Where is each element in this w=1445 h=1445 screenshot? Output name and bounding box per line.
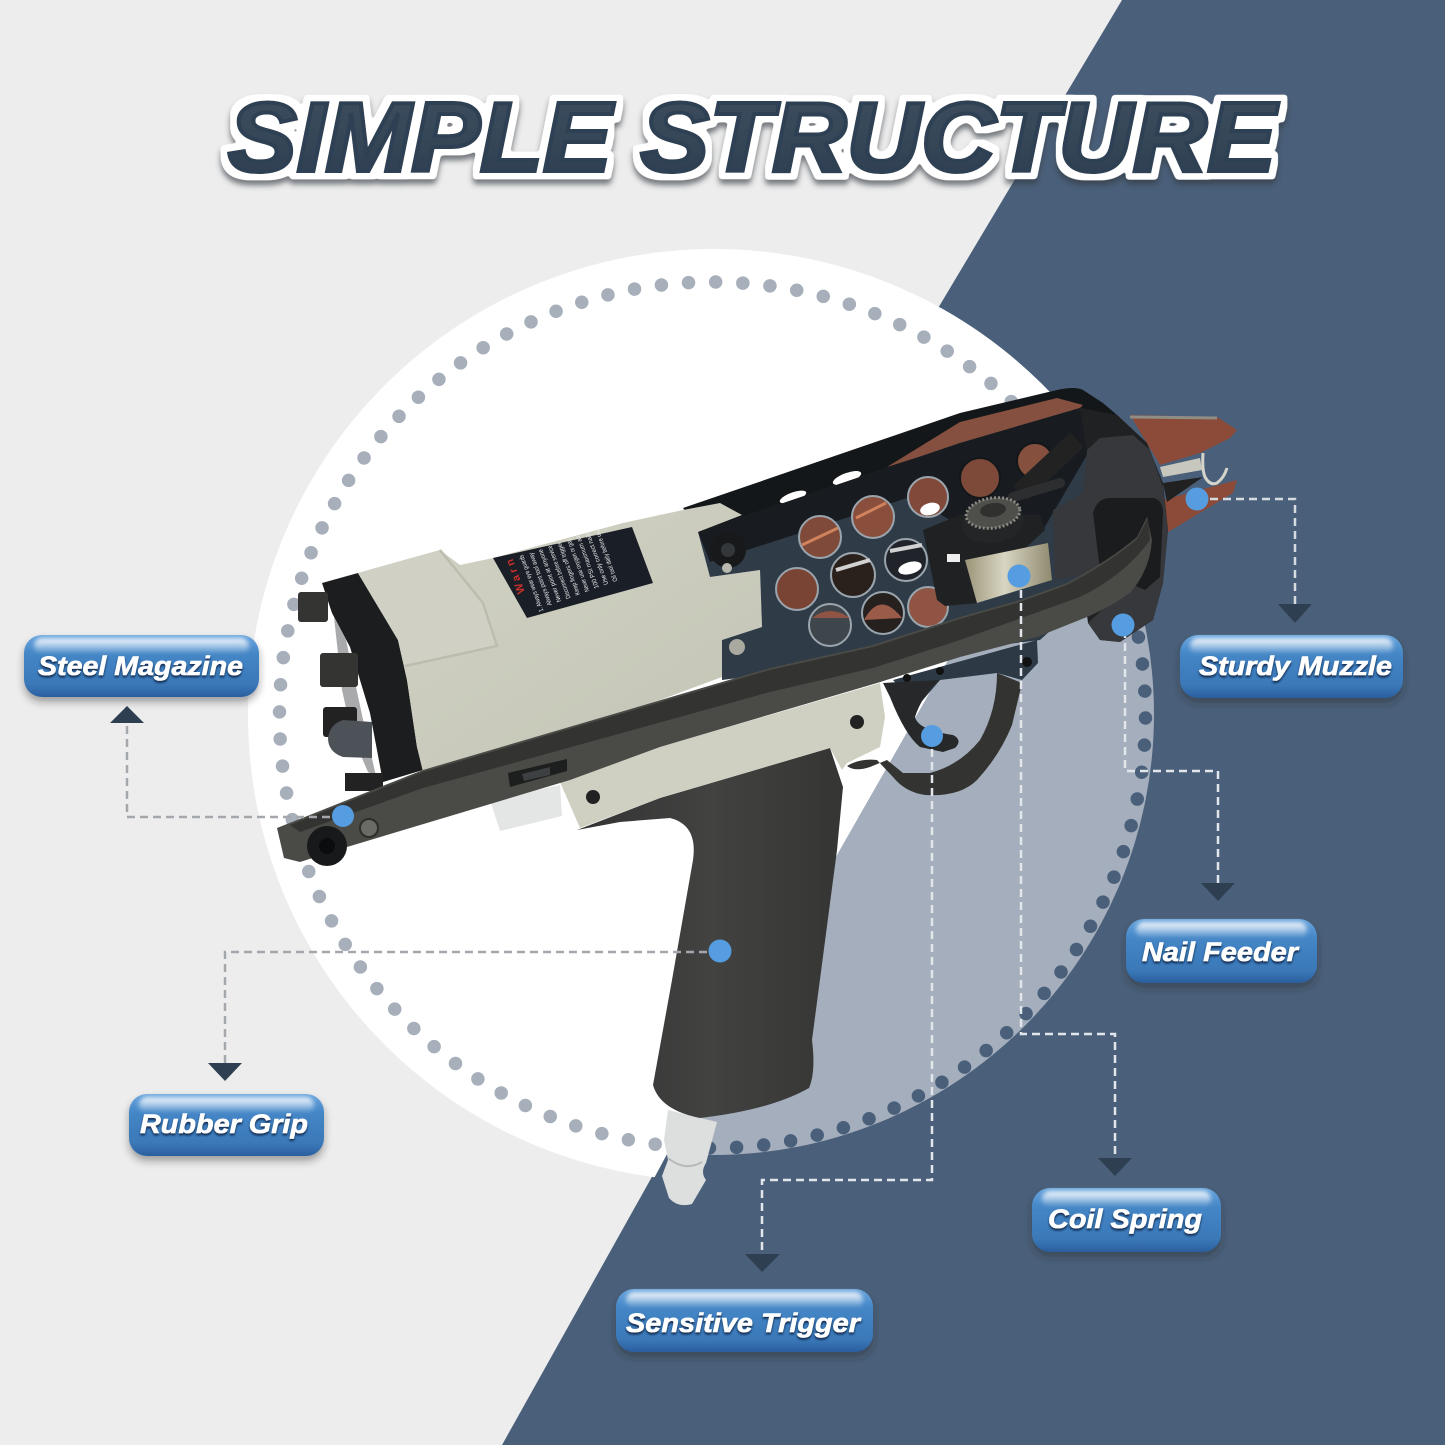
label: steel magazine: Steel Magazine <box>38 651 243 681</box>
magazine rail <box>277 517 1152 862</box>
warning label: Disconnect before service <box>547 544 573 600</box>
outer head frame <box>1080 408 1168 642</box>
warning label: 1. Always wear eye guards <box>518 553 545 613</box>
perforated steel plate <box>698 408 1150 680</box>
ridge shading <box>405 550 497 666</box>
warning label: Never point at anyone <box>537 548 563 603</box>
plate bolt <box>710 532 746 655</box>
muzzle top edge <box>1130 417 1217 418</box>
copper inner housing <box>887 398 1083 467</box>
bracket <box>923 440 1077 606</box>
leader line: nail feeder <box>1112 614 1235 901</box>
arch cut-outs <box>778 468 863 506</box>
black arch frame <box>683 388 1147 560</box>
nail gun product illustration <box>277 388 1237 1205</box>
right head plate <box>1053 435 1168 642</box>
rubber grip <box>577 748 843 1118</box>
safety slider <box>508 759 567 787</box>
label: sturdy muzzle: Sturdy Muzzle <box>1199 651 1392 681</box>
body screw <box>586 790 600 804</box>
black end cap <box>322 573 423 782</box>
label: rubber grip: Rubber Grip <box>140 1109 308 1139</box>
label: nail feeder: Nail Feeder <box>1142 937 1300 967</box>
label: sensitive trigger <box>616 1289 873 1352</box>
warning label: Use only correct nails <box>584 530 610 586</box>
trigger guard <box>847 673 1022 795</box>
white circle <box>248 249 1050 1178</box>
leader line: steel magazine <box>110 706 354 827</box>
leader line: coil spring <box>1008 564 1132 1176</box>
warning label: Keep fingers off trigger <box>556 540 582 596</box>
warning label: Oil tool daily before use <box>594 527 619 582</box>
end cap silver strip <box>334 617 376 776</box>
coil spring roller <box>965 543 1052 603</box>
beige cylinder body <box>358 503 762 772</box>
warning label: Never use oxygen or gas <box>565 537 591 593</box>
warning label: Always point tool away <box>528 551 554 606</box>
warning label: 100 PSI maximum air <box>575 534 601 589</box>
transparent connector <box>490 785 562 831</box>
label: rubber grip <box>129 1094 324 1156</box>
raised housing ridge <box>358 550 497 666</box>
rail bolts <box>307 819 378 866</box>
steel plate guard <box>893 640 1038 707</box>
staple hook <box>1160 453 1227 502</box>
grey circle segment <box>689 616 1154 1155</box>
label: sensitive trigger: Sensitive Trigger <box>626 1308 862 1338</box>
warning label: Warn <box>504 557 528 595</box>
trigger <box>883 680 959 752</box>
dark diagonal panel <box>502 0 1445 1445</box>
leader line: sensitive trigger <box>745 725 943 1272</box>
body screw right <box>850 715 864 729</box>
title: SIMPLE STRUCTURE <box>228 82 1279 192</box>
label: steel magazine <box>24 635 259 697</box>
knurled knob <box>960 494 1026 547</box>
warning label <box>493 526 653 618</box>
leader line: rubber grip <box>208 940 732 1081</box>
leader line: sturdy muzzle <box>1186 488 1312 623</box>
muzzle copper jaws <box>1130 415 1237 532</box>
head plate slot <box>1093 498 1163 590</box>
label: coil spring: Coil Spring <box>1048 1204 1203 1234</box>
label: coil spring <box>1032 1188 1221 1252</box>
end bolts <box>298 592 383 791</box>
lower body housing <box>560 683 885 828</box>
label: nail feeder <box>1126 919 1317 983</box>
dotted ring <box>280 282 1146 1148</box>
air coupler <box>662 1110 717 1205</box>
label: sturdy muzzle <box>1180 635 1403 698</box>
